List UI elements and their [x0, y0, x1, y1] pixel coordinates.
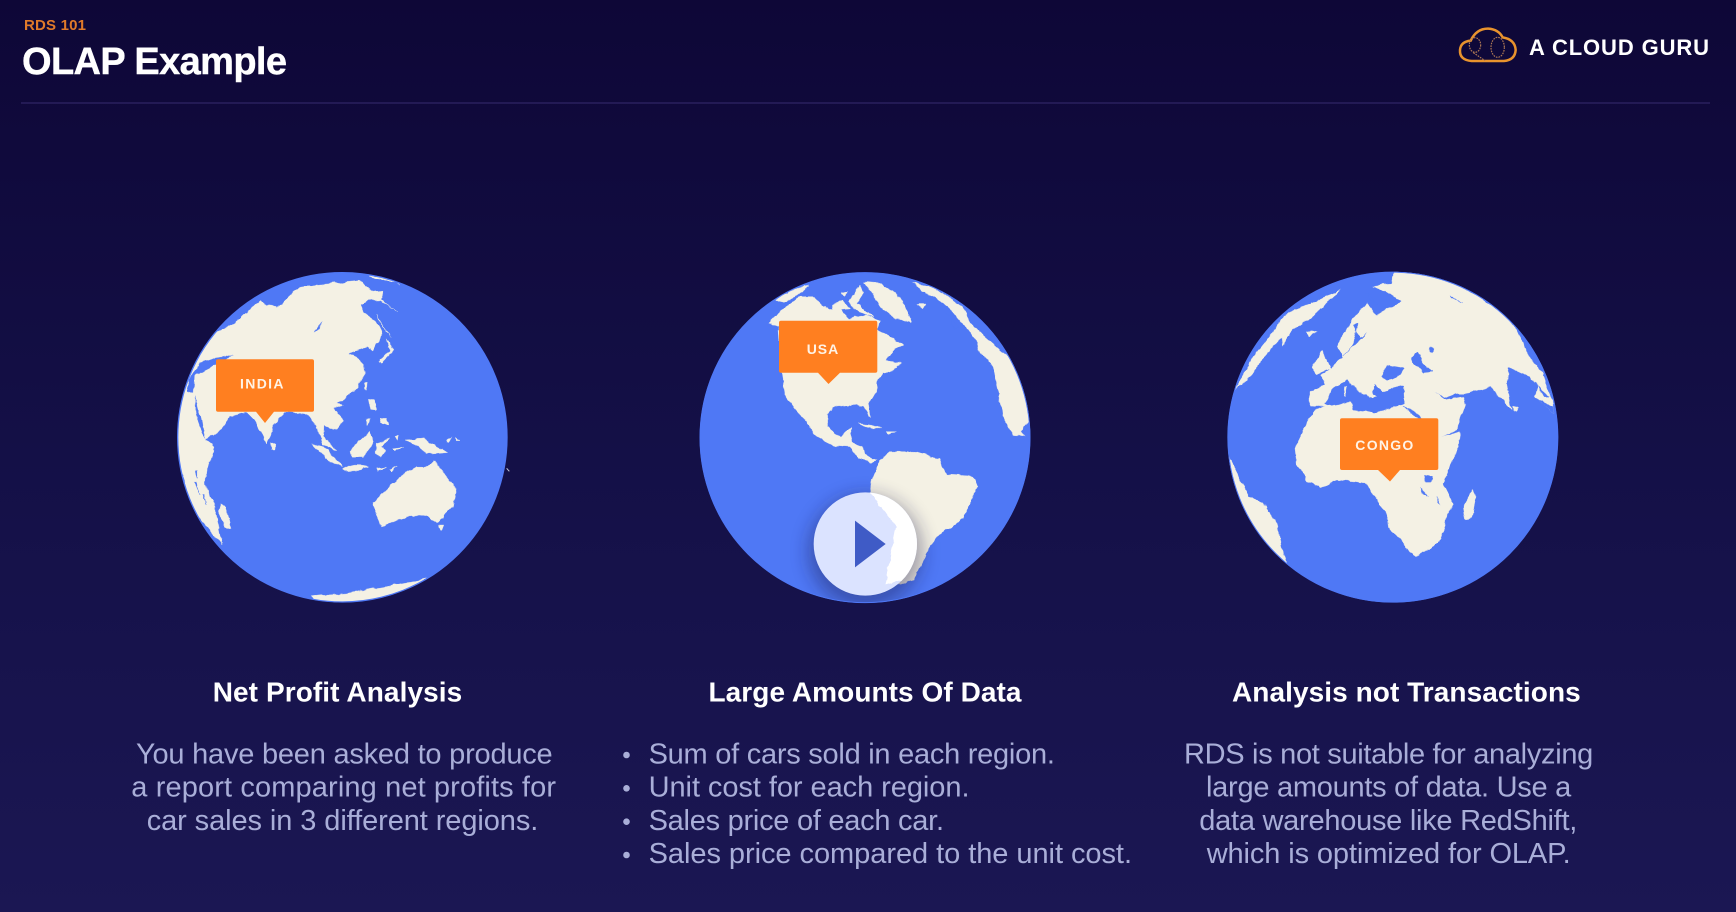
globe: India	[173, 272, 509, 607]
body text	[131, 738, 556, 837]
tag label: INDIA	[240, 376, 284, 392]
stray mark	[507, 468, 509, 471]
continents: Europe, Africa, Asia, Greenland, South America	[1223, 267, 1553, 565]
map tag: USA	[779, 321, 877, 384]
column: Large Amounts Of Data	[623, 676, 1132, 870]
continents: Asia, Africa, Australia	[173, 274, 460, 607]
map tag: INDIA	[216, 359, 314, 423]
bullet list: Sales price compared to the unit cost.	[649, 838, 1132, 870]
continents: Americas, Greenland, Africa	[768, 282, 1037, 608]
column: Analysis not Transactions	[1184, 676, 1593, 870]
play button	[814, 492, 917, 596]
column: Net Profit Analysis	[131, 676, 556, 837]
logo wordmark: A CLOUD GURU	[1529, 35, 1709, 60]
bullet list: Sum of cars sold in each region.	[649, 738, 1055, 770]
title: OLAP Example	[22, 41, 287, 83]
body text: a report comparing net profits for	[131, 772, 556, 804]
ocean	[177, 272, 507, 602]
shadow under play button	[809, 495, 922, 608]
tag label: USA	[807, 341, 838, 357]
map tag: CONGO	[1340, 418, 1438, 482]
heading: Net Profit Analysis	[213, 676, 462, 707]
logo: A Cloud Guru	[1460, 29, 1709, 61]
body text	[1184, 738, 1593, 870]
body text: You have been asked to produce	[136, 738, 553, 770]
body text: car sales in 3 different regions.	[147, 805, 538, 837]
bullet list	[623, 738, 1132, 870]
ocean	[700, 272, 1030, 603]
body text: data warehouse like RedShift,	[1199, 805, 1577, 837]
ocean	[1227, 272, 1558, 602]
tag label: CONGO	[1355, 437, 1413, 453]
bullet list: Sales price of each car.	[649, 805, 944, 837]
heading: Analysis not Transactions	[1232, 676, 1581, 707]
body text: which is optimized for OLAP.	[1206, 838, 1571, 870]
bullet list: Unit cost for each region.	[649, 772, 970, 804]
header eyebrow: RDS 101: RDS 101	[24, 17, 86, 34]
globe: Congo	[1223, 267, 1558, 602]
globe: USA	[700, 272, 1037, 608]
heading: Large Amounts Of Data	[708, 676, 1022, 707]
icon: cloud	[1460, 29, 1516, 61]
body text: large amounts of data. Use a	[1206, 772, 1572, 804]
body text: RDS is not suitable for analyzing	[1184, 738, 1593, 770]
